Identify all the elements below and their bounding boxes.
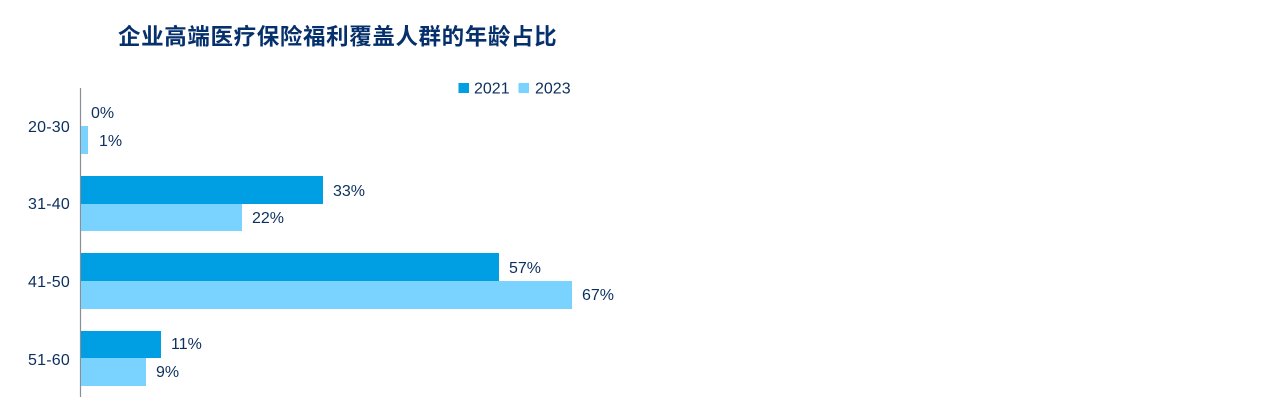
group 41-50: 57% bbox=[509, 260, 541, 277]
chart axis bbox=[80, 88, 82, 397]
group 31-40: 22% bbox=[252, 210, 284, 227]
group 20-30: 1% bbox=[99, 133, 122, 150]
group 51-60 bbox=[28, 331, 202, 386]
group 20-30: 0% bbox=[91, 105, 114, 122]
group 51-60: 9% bbox=[156, 364, 179, 381]
group 20-30 bbox=[28, 105, 122, 154]
legend: 2021 bbox=[474, 80, 510, 98]
group 41-50: 41-50 bbox=[28, 274, 70, 291]
group 41-50: 67% bbox=[582, 287, 614, 304]
legend bbox=[458, 80, 571, 98]
legend: 2023 bbox=[535, 80, 571, 98]
group 20-30: 20-30 bbox=[28, 119, 70, 136]
group 31-40 bbox=[28, 176, 365, 231]
group 31-40: 31-40 bbox=[28, 196, 70, 213]
group 51-60: 11% bbox=[171, 336, 202, 353]
title: 企业高端医疗保险福利覆盖人群的年龄占比 bbox=[118, 24, 557, 50]
group 31-40: 33% bbox=[333, 183, 365, 200]
group 51-60: 51-60 bbox=[28, 352, 70, 369]
group 41-50 bbox=[28, 253, 614, 309]
